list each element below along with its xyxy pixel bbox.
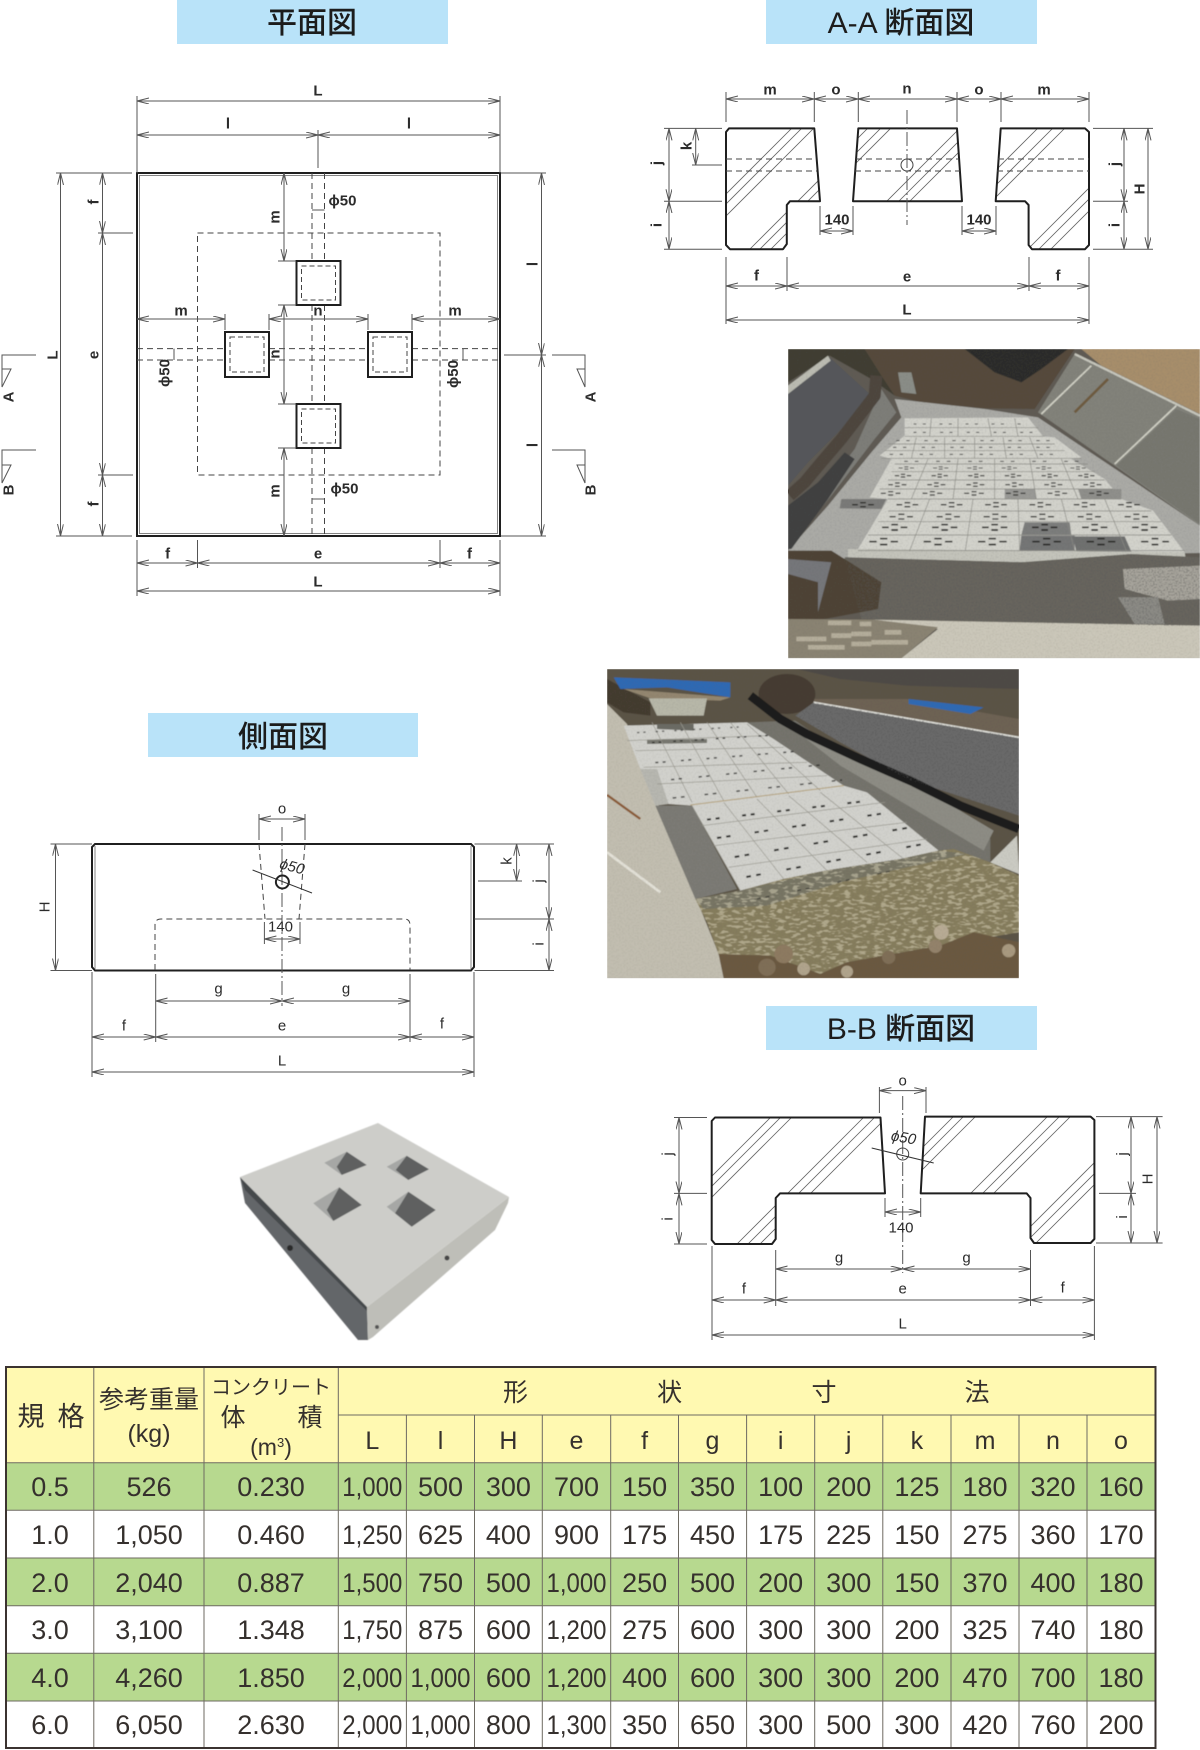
table row 4.0: 700 [1030, 1663, 1076, 1693]
A-A dimension labels [648, 80, 1148, 318]
A-A dimension labels: o [831, 82, 841, 98]
table row 4.0: 4.0 [31, 1663, 69, 1693]
A-A hidden pipe lines [726, 159, 1089, 171]
side view dimension labels: g [214, 980, 223, 998]
B-B dimension labels: ϕ50 [890, 1127, 918, 1149]
table header: o [1114, 1427, 1128, 1455]
plan section mark A right [552, 355, 600, 402]
plan section mark B left [0, 450, 36, 495]
plan top dimension arrows [137, 101, 500, 135]
A-A block outlines [726, 128, 1089, 249]
plan section mark B right: B [582, 484, 600, 495]
table header: m [975, 1427, 995, 1455]
side view dimension labels: f [440, 1016, 445, 1032]
table header: 3 [277, 1435, 284, 1450]
A-A dimension labels: m [763, 82, 777, 98]
A-A extension lines [664, 92, 1153, 324]
A-A dimension labels: i [1106, 223, 1124, 227]
table row 3.0: 600 [486, 1615, 531, 1645]
plan section mark A left [0, 355, 36, 402]
table row 6.0: 6.0 [31, 1710, 69, 1740]
plan dimension labels [44, 82, 542, 590]
plan dimension labels: l [524, 262, 542, 266]
plan dimension labels: l [524, 443, 542, 447]
B-B dimension labels: L [899, 1316, 907, 1332]
table row 4.0: 4,260 [115, 1663, 183, 1693]
table row 1.0: 275 [962, 1520, 1008, 1550]
table header: n [1046, 1427, 1060, 1455]
table header: L [365, 1427, 379, 1455]
A-A top dimension arrows [726, 98, 1089, 100]
table row 3.0: 875 [418, 1615, 463, 1645]
A-A dimension labels: 140 [966, 212, 992, 228]
B-B dimension labels: j [1114, 1152, 1131, 1157]
table row 2.0: 150 [894, 1568, 939, 1598]
A-A dimension labels: e [903, 268, 911, 286]
plan dimension labels: f [165, 546, 171, 562]
plan dimension labels: m [266, 484, 284, 498]
table row 2.0: 250 [622, 1568, 667, 1598]
plan dimension labels: e [86, 351, 102, 359]
table row 6.0: 2.630 [237, 1710, 305, 1740]
block left face [240, 1177, 368, 1340]
plan dimension labels: e [314, 546, 322, 562]
table header: 寸 [811, 1379, 837, 1407]
plan section mark A right: A [582, 391, 600, 402]
table row 2.0: 0.887 [237, 1568, 305, 1598]
B-B dimension labels: e [899, 1280, 907, 1298]
B-B dimension labels: o [899, 1072, 907, 1090]
table row 2.0: 2,040 [115, 1568, 183, 1598]
side view outline [92, 844, 474, 970]
photo: concrete block product [240, 1123, 509, 1340]
table row 0.5: 100 [758, 1472, 803, 1502]
table row 1.0: 1,050 [115, 1520, 183, 1550]
plan left dimension arrows [60, 173, 102, 536]
B-B dimension labels [660, 1072, 1156, 1332]
A-A hatching [727, 129, 1088, 248]
table row 1.0: 175 [622, 1520, 667, 1550]
plan dimension labels: m [266, 210, 284, 224]
plan dimension labels: m [448, 302, 462, 320]
A-A centre line and hole [901, 110, 913, 225]
plan section mark A left: A [0, 391, 18, 402]
table header: ) [284, 1434, 292, 1460]
table header: f [641, 1427, 648, 1455]
table header: k [911, 1427, 924, 1455]
plan extension lines [56, 96, 546, 596]
table row 1.0: 0.460 [237, 1520, 305, 1550]
side view extension lines [50, 814, 554, 1077]
table row 6.0: 800 [486, 1710, 531, 1740]
A-A dimension labels: j [1106, 162, 1124, 167]
heading: 平面図 [177, 0, 448, 44]
plan section mark B right [552, 450, 600, 495]
table header: 格 [58, 1402, 84, 1432]
plan dimension labels: f [467, 546, 473, 562]
table row 3.0: 300 [758, 1615, 803, 1645]
table row 4.0: 180 [1098, 1663, 1144, 1693]
dimension table [6, 1367, 1156, 1748]
plan dimension labels: n [313, 302, 323, 320]
side view dimension labels: o [278, 800, 286, 818]
B-B dimension labels: f [742, 1280, 747, 1298]
table header: l [438, 1427, 443, 1455]
table row 3.0 [6, 1606, 1156, 1653]
table row 3.0: 1,750 [342, 1615, 402, 1645]
table row 0.5: 500 [418, 1472, 463, 1502]
block side holes [287, 1245, 450, 1329]
table row 6.0: 2,000 [342, 1710, 402, 1740]
plan dimension labels: l [407, 116, 411, 132]
block top face [240, 1123, 509, 1307]
A-A dimension labels: i [648, 223, 666, 227]
plan dimension labels: ϕ50 [156, 359, 174, 387]
A-A bottom dimension arrows [726, 231, 1089, 320]
side view dimension arrows [56, 819, 549, 1072]
table header: 体 [220, 1404, 246, 1432]
table header: 参考重量 [99, 1386, 199, 1414]
B-B dimension labels: f [1061, 1280, 1066, 1296]
side view dimension labels: L [278, 1052, 286, 1070]
table row 6.0: 6,050 [115, 1710, 183, 1740]
table row 2.0: 1,500 [342, 1568, 402, 1598]
table row 0.5: 700 [554, 1472, 599, 1502]
table row 2.0: 200 [758, 1568, 803, 1598]
table header: H [499, 1427, 517, 1455]
table row 2.0: 2.0 [31, 1568, 69, 1598]
table header: 状 [657, 1379, 682, 1407]
table header [6, 1367, 1156, 1463]
table row 4.0: 400 [622, 1663, 667, 1693]
A-A dimension labels: n [902, 80, 912, 98]
B-B section drawing [662, 1078, 1163, 1340]
table row 2.0: 500 [690, 1568, 735, 1598]
plan dimension labels: L [44, 350, 62, 360]
table row 2.0: 500 [486, 1568, 531, 1598]
plan dimension labels: L [313, 574, 323, 590]
table row 1.0: 1,250 [342, 1520, 402, 1550]
table row 2.0: 750 [418, 1568, 463, 1598]
B-B dimension labels: 140 [888, 1220, 914, 1236]
table row 6.0: 1,300 [546, 1710, 606, 1740]
heading: A-A 断面図 [766, 0, 1037, 44]
A-A dimension labels: f [754, 268, 760, 284]
table row 0.5: 0.230 [237, 1472, 305, 1502]
side view dimension labels [36, 800, 548, 1070]
heading: 平面図: 平面図 [267, 7, 357, 40]
table header: コンクリート [211, 1376, 331, 1399]
side view dimension labels: 140 [268, 918, 293, 936]
table row 6.0: 650 [690, 1710, 735, 1740]
plan four square openings [225, 261, 412, 448]
table row 4.0 [6, 1653, 1156, 1701]
table row 0.5: 180 [962, 1472, 1008, 1502]
table row 4.0: 600 [486, 1663, 531, 1693]
side view dimension labels: j [530, 879, 548, 884]
A-A side dimension arrows [669, 128, 1148, 249]
table row 4.0: 1.850 [237, 1663, 305, 1693]
table row 2.0: 1,000 [546, 1568, 606, 1598]
table row 4.0: 470 [962, 1663, 1008, 1693]
block right face [367, 1197, 509, 1340]
side view dimension labels: H [36, 902, 54, 912]
plan phi 50 small dimension marks [174, 210, 463, 499]
plan dimension labels: f [86, 198, 102, 204]
table row 6.0: 500 [826, 1710, 871, 1740]
side view hidden recess [155, 919, 410, 970]
B-B dimension labels: i [1114, 1215, 1131, 1219]
table row 0.5: 160 [1098, 1472, 1144, 1502]
table row 4.0: 1,200 [546, 1663, 606, 1693]
table row 4.0: 600 [690, 1663, 735, 1693]
plan right dimension arrows [540, 173, 542, 536]
table row 1.0: 150 [894, 1520, 939, 1550]
plan view drawing [0, 82, 600, 596]
A-A dimension labels: m [1037, 82, 1051, 98]
plan dimension labels: f [86, 500, 102, 506]
table header: e [570, 1427, 583, 1455]
plan bottom dimension arrows [137, 563, 500, 591]
table row 2.0: 300 [826, 1568, 871, 1598]
B-B dimension labels: H [1140, 1174, 1156, 1184]
table row 6.0: 200 [1098, 1710, 1144, 1740]
table row 6.0: 300 [894, 1710, 939, 1740]
B-B hatching [712, 1118, 1094, 1243]
table row 0.5: 350 [690, 1472, 735, 1502]
side view drawing [36, 800, 554, 1077]
A-A dimension labels: L [902, 302, 912, 318]
A-A dimension labels: H [1132, 184, 1148, 194]
table row 3.0: 200 [894, 1615, 939, 1645]
table outer border [6, 1367, 1156, 1748]
heading: A-A 断面図: A-A 断面図 [828, 7, 974, 40]
B-B extension lines [674, 1087, 1163, 1340]
A-A dimension labels: j [648, 161, 666, 166]
table row 3.0: 3.0 [31, 1615, 69, 1645]
side view dimension labels: i [530, 942, 548, 946]
table row 4.0: 200 [894, 1663, 939, 1693]
heading: B-B 断面図 [766, 1006, 1037, 1050]
table row 0.5: 1,000 [342, 1472, 402, 1502]
table row 3.0: 1,200 [546, 1615, 606, 1645]
table row 6.0: 420 [962, 1710, 1008, 1740]
photo: installed blocks with water in foreground [607, 669, 1019, 978]
plan dimension labels: ϕ50 [331, 480, 358, 498]
side view dimension labels: f [122, 1018, 127, 1034]
table row 0.5: 200 [826, 1472, 871, 1502]
table header: j [845, 1427, 851, 1455]
B-B block outlines [712, 1117, 1094, 1244]
side view dimension labels: k [498, 857, 516, 865]
table row 3.0: 325 [962, 1615, 1008, 1645]
table row 4.0: 300 [826, 1663, 871, 1693]
table row 0.5: 0.5 [31, 1472, 69, 1502]
table header: 規 [18, 1402, 44, 1432]
A-A dimension labels: f [1056, 268, 1062, 284]
table row 6.0 [6, 1701, 1156, 1748]
plan dimension labels: L [313, 82, 323, 100]
table row 1.0: 225 [826, 1520, 871, 1550]
A-A dimension labels: o [974, 82, 984, 98]
table row 1.0: 450 [690, 1520, 735, 1550]
side view hidden tapered opening [259, 844, 305, 919]
B-B dimension arrows [679, 1091, 1157, 1335]
table row 1.0: 900 [554, 1520, 599, 1550]
side view dimension labels: g [342, 980, 350, 998]
table row 1.0: 175 [758, 1520, 803, 1550]
photo: installed blocks viewed from downstream [788, 349, 1200, 658]
table row 3.0: 1.348 [237, 1615, 305, 1645]
plan section mark B left: B [0, 484, 18, 495]
table row 2.0 [6, 1558, 1156, 1606]
table row 0.5: 320 [1030, 1472, 1076, 1502]
table grid lines [6, 1367, 1155, 1748]
B-B dimension labels: i [660, 1217, 676, 1221]
table row 2.0: 400 [1030, 1568, 1076, 1598]
table row 4.0: 300 [758, 1663, 803, 1693]
table row 6.0: 350 [622, 1710, 667, 1740]
table row 2.0: 180 [1098, 1568, 1144, 1598]
plan dimension labels: l [226, 116, 230, 132]
table row 0.5: 125 [894, 1472, 939, 1502]
table header: (m [250, 1434, 277, 1460]
B-B dimension labels: g [835, 1250, 843, 1266]
table row 3.0: 600 [690, 1615, 735, 1645]
plan dimension labels: ϕ50 [445, 360, 462, 388]
side view centre line and hole [253, 827, 312, 1006]
table row 1.0: 400 [486, 1520, 531, 1550]
plan dimension labels: m [174, 302, 188, 320]
heading: 側面図: 側面図 [238, 721, 328, 754]
plan hidden pipe channels [137, 173, 500, 536]
heading: B-B 断面図: B-B 断面図 [827, 1013, 975, 1046]
table row 0.5 [6, 1463, 1156, 1510]
A-A section drawing [648, 80, 1190, 324]
table row 0.5: 526 [126, 1472, 172, 1502]
table row 1.0: 170 [1098, 1520, 1144, 1550]
B-B centre line and hole [872, 1096, 934, 1273]
table row 3.0: 300 [826, 1615, 871, 1645]
side view dimension labels: ϕ50 [278, 856, 307, 879]
table header: i [778, 1427, 783, 1455]
table row 3.0: 740 [1030, 1615, 1076, 1645]
table row 6.0: 760 [1030, 1710, 1076, 1740]
table header: (kg) [127, 1420, 171, 1448]
table row 4.0: 2,000 [342, 1663, 402, 1693]
table header: 法 [964, 1379, 990, 1407]
side view dimension labels: e [278, 1018, 286, 1034]
table row 4.0: 1,000 [410, 1663, 470, 1693]
table row 1.0: 360 [1030, 1520, 1076, 1550]
table header: g [706, 1427, 719, 1455]
plan dimension labels: n [266, 349, 284, 359]
table row 6.0: 300 [758, 1710, 803, 1740]
table header: 積 [297, 1404, 323, 1432]
plan hidden recess outline [198, 233, 440, 475]
table row 2.0: 370 [962, 1568, 1008, 1598]
table row 1.0 [6, 1510, 1156, 1558]
heading: 側面図 [148, 713, 418, 757]
table row 6.0: 1,000 [410, 1710, 470, 1740]
A-A dimension labels: k [678, 141, 696, 150]
plan inner dimension arrows [137, 173, 500, 536]
table row 1.0: 625 [418, 1520, 463, 1550]
table row 3.0: 3,100 [115, 1615, 183, 1645]
table row 3.0: 275 [622, 1615, 667, 1645]
table row 3.0: 180 [1098, 1615, 1144, 1645]
table row 1.0: 1.0 [31, 1520, 69, 1550]
B-B dimension labels: g [962, 1250, 971, 1266]
table row 0.5: 300 [486, 1472, 531, 1502]
plan dimension labels: ϕ50 [329, 192, 356, 210]
table row 0.5: 150 [622, 1472, 667, 1502]
block four openings [313, 1152, 436, 1227]
table header: 形 [503, 1379, 528, 1407]
A-A dimension labels: 140 [824, 212, 850, 228]
plan outline [137, 173, 500, 536]
B-B dimension labels: j [660, 1152, 676, 1157]
